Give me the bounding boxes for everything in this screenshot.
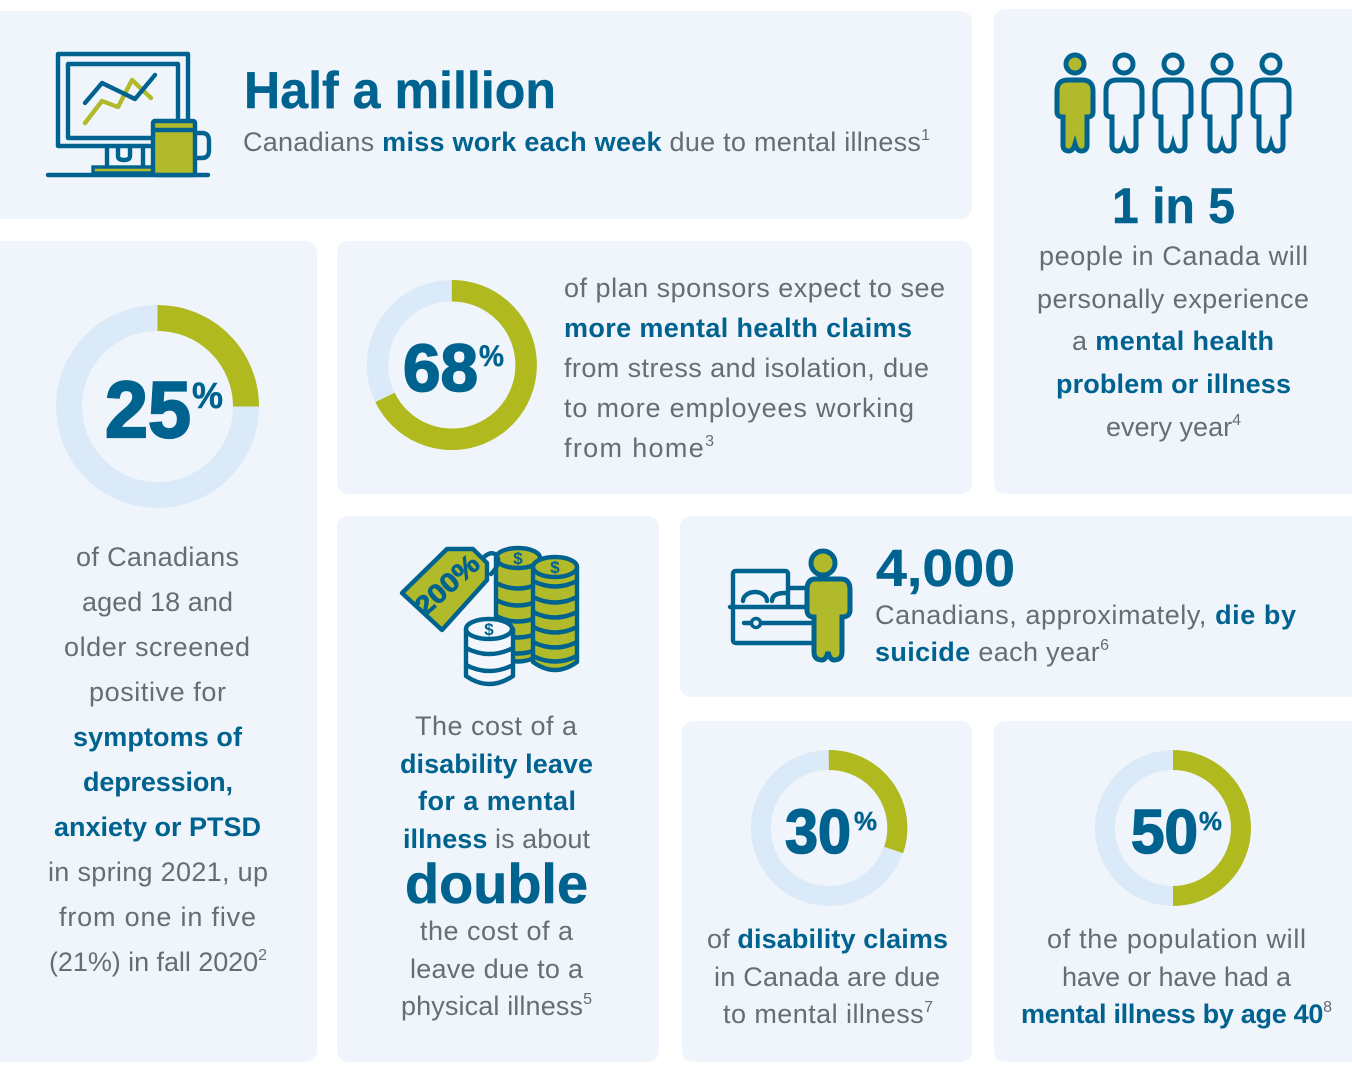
text: 68 percent description: 3 (705, 433, 714, 450)
text: 25 percent description: positive for (89, 677, 226, 707)
panel: 50 percent (994, 721, 1352, 1062)
text: 1 in 5 description: a mental health (1072, 326, 1274, 356)
text: 68 percent description: from home (564, 433, 704, 463)
text: 1 in 5 description: problem or illness (1056, 369, 1291, 399)
text: cost description: the cost of a (420, 916, 574, 946)
chart: 30 percent ring: % (854, 806, 877, 836)
icon: coins and price tag: $ (550, 558, 560, 577)
text: 50 percent description: mental illness by age 40 (1021, 999, 1323, 1029)
chart: 50 percent ring: 50 (1131, 798, 1198, 867)
text: 25 percent description: depression, (83, 767, 233, 797)
text: 50 percent description: of the population will (1047, 924, 1306, 954)
text: 30 percent description (707, 924, 948, 1029)
text: 25 percent description: of Canadians (76, 542, 239, 572)
text: cost description: The cost of a (415, 711, 578, 741)
chart: 68 percent ring: 68 (403, 331, 478, 406)
text: 68 percent description: of plan sponsors expect to see (564, 273, 945, 303)
text: cost description: illness is about (403, 824, 590, 854)
text: 50 percent description (1021, 924, 1332, 1029)
text: cost description: disability leave (400, 749, 593, 779)
text: 68 percent description: from stress and isolation, due (564, 353, 929, 383)
text: 30 percent description: of disability claims (707, 924, 948, 954)
text: 50 percent description: 8 (1323, 999, 1332, 1016)
chart: 30 percent ring: 30 (785, 798, 851, 867)
panel: 30 percent (682, 721, 972, 1062)
panel: 25 percent (0, 241, 317, 1062)
text: 25 percent description: (21%) in fall 2020 (49, 947, 258, 977)
text: 4,000 description: 6 (1100, 637, 1109, 654)
text: miss work each week: 1 (921, 127, 930, 144)
text: cost description: leave due to a (410, 954, 584, 984)
text: 68 percent description: more mental health claims (564, 313, 912, 343)
heading: 4,000: 4,000 (876, 540, 1015, 598)
text: 1 in 5 description: 4 (1232, 412, 1241, 429)
text: 4,000 description: suicide each year (875, 637, 1100, 667)
text: 1 in 5 description (1037, 241, 1309, 442)
text: 1 in 5 description: every year (1106, 412, 1232, 442)
panel: half a million (0, 11, 972, 219)
chart: 50 percent ring (1105, 760, 1241, 896)
panel: 4,000 (680, 516, 1352, 697)
text: 25 percent description: in spring 2021, up (48, 857, 268, 887)
icon: coins and price tag: $ (513, 549, 523, 568)
panel: 1 in 5 (994, 9, 1352, 494)
panel: 68 percent (337, 241, 972, 494)
text: 25 percent description: 2 (258, 947, 267, 964)
icon: computer and mug (48, 54, 209, 175)
chart: 68 percent ring: % (479, 340, 504, 373)
text: 1 in 5 description: people in Canada will (1039, 241, 1308, 271)
text: 68 percent description (564, 273, 945, 463)
icon: person at bedside (730, 551, 850, 660)
text: cost description: 5 (583, 991, 592, 1008)
text: 1 in 5 description: personally experience (1037, 284, 1309, 314)
text: 68 percent description: to more employees working (564, 393, 914, 423)
text: 25 percent description (48, 542, 268, 977)
text: 25 percent description: anxiety or PTSD (54, 812, 261, 842)
icon: coins and price tag: $ (484, 620, 494, 639)
heading: half a million: Half a million (244, 62, 556, 120)
text: 25 percent description: older screened (64, 632, 250, 662)
text: 30 percent description: to mental illness (723, 999, 924, 1029)
text: 4,000 description (875, 600, 1296, 667)
text: 25 percent description: from one in five (59, 902, 256, 932)
text: cost description (400, 711, 593, 1021)
chart: 50 percent ring: % (1199, 806, 1222, 836)
text: 25 percent description: aged 18 and (82, 587, 233, 617)
chart: 25 percent ring (69, 318, 246, 495)
text: 4,000 description: Canadians, approximately, die by (875, 600, 1296, 630)
text: 25 percent description: symptoms of (73, 722, 243, 752)
text: cost description: physical illness (401, 991, 583, 1021)
text: cost description: double (405, 852, 588, 915)
chart: 25 percent ring: 25 (105, 365, 191, 454)
chart: 30 percent ring (761, 760, 897, 896)
chart: 25 percent ring: % (192, 375, 223, 416)
text: 30 percent description: in Canada are due (714, 962, 940, 992)
text: 50 percent description: have or have had a (1062, 962, 1292, 992)
heading: 1 in 5: 1 in 5 (1112, 178, 1235, 234)
panel: cost of disability leave (337, 516, 659, 1062)
icon: coins and price tag (402, 548, 577, 684)
icon: five people (1057, 55, 1289, 151)
text: miss work each week: Canadians miss work each week due to mental illness (243, 127, 921, 157)
icon: coins and price tag: 200% (409, 548, 485, 621)
text: cost description: for a mental (418, 786, 576, 816)
chart: 68 percent ring (378, 291, 526, 439)
text: 30 percent description: 7 (924, 999, 933, 1016)
